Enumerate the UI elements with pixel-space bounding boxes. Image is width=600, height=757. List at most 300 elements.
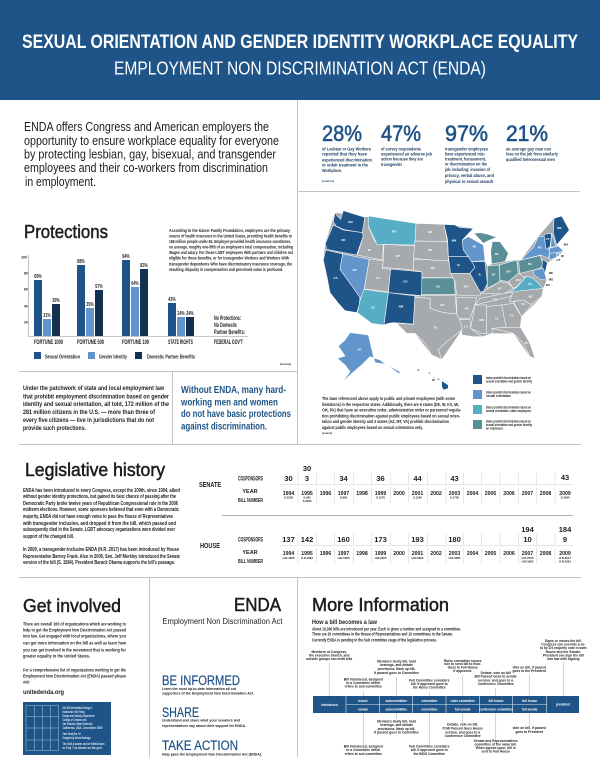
step note: rules committee: rule to send bill to floor. bbox=[444, 662, 481, 666]
step note: senate introduction bbox=[344, 744, 383, 756]
credit box with grid poster: College of Creative Arts bbox=[62, 718, 87, 722]
step note: subcommittee: hearings, and debate bbox=[380, 663, 413, 667]
text block: get involved: visit: bbox=[23, 680, 30, 684]
state abbreviations: WY bbox=[396, 254, 400, 258]
credit box with grid poster: California, USA - December 2009 bbox=[62, 726, 103, 730]
step note: floor debate: Conference Committee bbox=[478, 682, 514, 686]
text block: patchwork paragraph: 281 million citizens in the U.S. — more than three of bbox=[23, 409, 156, 416]
text block: get involved: can get more information on the bill as well as learn how bbox=[23, 640, 126, 646]
credit box with grid poster: to 5 by 7 as shown on the grid. bbox=[62, 746, 103, 750]
federal note: No Protections: bbox=[214, 316, 241, 322]
step note: floor debate bbox=[475, 671, 517, 686]
state abbreviations: NV bbox=[353, 268, 357, 272]
step note: rules committee bbox=[444, 659, 482, 673]
table: Senate: SENATE bbox=[199, 482, 221, 489]
step note: president: Signs or vetoes the bill. bbox=[545, 639, 582, 643]
house cosponsor counts: 137 bbox=[282, 535, 295, 544]
state abbreviations: WI bbox=[473, 245, 476, 249]
text block: legislative history: support of the changed bill. bbox=[23, 534, 74, 540]
process bar: conference committee bbox=[479, 708, 513, 712]
state abbreviations: WA bbox=[348, 220, 354, 224]
house bill numbers: H.R.2355 bbox=[375, 556, 387, 560]
text block: map note: against public employees based on sexual orientation only. bbox=[322, 425, 423, 430]
senate years: 2007 bbox=[522, 491, 533, 497]
block: take action: Help pass the Employment Non Discrimination Act (ENDA). bbox=[162, 752, 262, 756]
text block: legislative history: majority, ENDA did not have enough votes to pass the House of Representatives bbox=[23, 514, 173, 520]
block: share: SHARE bbox=[162, 705, 199, 720]
senate years: 1998 bbox=[356, 491, 368, 497]
state abbreviations: GA bbox=[509, 314, 515, 318]
category labels: FORTUNE 1000 bbox=[34, 340, 63, 346]
stat: 47%: 47% bbox=[381, 121, 421, 146]
state abbreviations: MO bbox=[464, 285, 469, 289]
stat: 97%: transgender employees bbox=[445, 146, 488, 152]
senate cosponsor counts bbox=[284, 464, 569, 483]
state abbreviations: OK bbox=[440, 303, 445, 307]
bars: Fortune 100: 94% bbox=[122, 254, 130, 260]
step note: senate committee: the BIDS Committee bbox=[413, 752, 445, 756]
house bill numbers: H.R.1858 bbox=[338, 556, 350, 560]
senate years: 1995 bbox=[301, 491, 313, 497]
axis bbox=[28, 255, 248, 336]
callout: without ENDA: working men and women bbox=[180, 398, 278, 408]
bars: Fortune 500: 35% bbox=[86, 302, 94, 308]
state abbreviations: NM bbox=[399, 305, 404, 309]
state abbreviations: SD bbox=[428, 248, 433, 252]
callout: without ENDA bbox=[180, 385, 291, 432]
house years: 2001 bbox=[412, 551, 423, 557]
stat: 97%: job including: invasion of bbox=[444, 167, 490, 172]
credit box with grid poster: Case Study No. 04 bbox=[62, 732, 81, 736]
block: share: Understand and share what your senators and bbox=[162, 718, 241, 722]
senate years: 1999 bbox=[375, 491, 386, 497]
state abbreviations: OR bbox=[341, 238, 346, 242]
credit box with grid poster: Instructor: Wei Yang bbox=[62, 710, 85, 714]
step note: conference committee: committee of the same bill. bbox=[475, 742, 517, 746]
intro text block: ENDA offers Congress and American employers the bbox=[24, 120, 269, 134]
text block: Kaiser paragraph bbox=[169, 228, 293, 272]
senate cosponsor counts: 30 bbox=[303, 464, 311, 473]
federal note: Partner Benefits: bbox=[214, 330, 245, 336]
house years: 2007 bbox=[522, 551, 533, 557]
step note: house introduction: to a Committee which bbox=[346, 681, 380, 685]
step note: drafting: Members of Congress, bbox=[312, 650, 347, 654]
US map bbox=[323, 211, 569, 390]
text block: get involved: There are overall 100 of organizations which are working to bbox=[23, 622, 126, 626]
legend item 3: states prohibit discrimination based on bbox=[486, 406, 531, 410]
state abbreviations: DE bbox=[549, 271, 553, 275]
state abbreviations: TX bbox=[433, 326, 437, 330]
text block: patchwork paragraph: provide such protections. bbox=[23, 425, 86, 432]
block: share bbox=[162, 705, 246, 728]
block: take action: TAKE ACTION bbox=[162, 738, 238, 753]
state abbreviations: IL bbox=[479, 272, 481, 276]
intro text block: employees and their co-workers from discrimination bbox=[24, 161, 268, 175]
text block: bill intro: About 10,000 bills are introduced per year. Each is given a number and assigned to a committee. bbox=[312, 626, 461, 632]
legend item 4 bbox=[473, 420, 532, 430]
process bar: full house bbox=[522, 699, 537, 703]
step note: conference committee: sent to Full House bbox=[481, 750, 510, 754]
senate years: 1997 bbox=[338, 491, 349, 497]
bar chart: protections by employer bbox=[21, 254, 291, 366]
text block: get involved: For a comprehensive list of organizations working to get the bbox=[23, 668, 126, 672]
stat: 21%: lose on the job from similarly bbox=[506, 152, 558, 156]
text block: legislative history: version of the bill (S. 1584). President Barack Obama supports the bill's passage. bbox=[23, 560, 175, 566]
step note: president: House and the Senate. bbox=[546, 650, 581, 654]
step note: senate introduction: refers to sub committee bbox=[345, 752, 382, 756]
state abbreviations: VT bbox=[546, 237, 550, 241]
step note: house introduction: Bill introduced, assigned bbox=[344, 678, 383, 682]
step note: senate committee bbox=[409, 744, 450, 756]
table: Senate: YEAR bbox=[242, 489, 258, 495]
step note: subcommittee: Members study bill, hold bbox=[377, 660, 416, 664]
house years: 1996 bbox=[320, 551, 331, 557]
bars: State rights: 24% bbox=[186, 311, 194, 317]
house years: 2002 bbox=[430, 551, 442, 557]
step note: conference committee bbox=[474, 739, 518, 754]
federal note: No Domestic bbox=[214, 323, 237, 329]
text block: Kaiser paragraph: eligible for these benefits, or for transgender Workers and Workers With bbox=[169, 256, 289, 260]
text block: patchwork paragraph: that prohibit employment discrimination based on gender bbox=[23, 394, 169, 400]
callout: without ENDA: against discrimination. bbox=[181, 422, 267, 432]
text block: bill intro: There are 20 committees in the House of Representatives and 16 committees in the Senate. bbox=[312, 632, 453, 636]
step note: committee: the Rules Committee bbox=[413, 686, 446, 690]
step note: senate floor: If bill Passed Goes House bbox=[443, 726, 483, 730]
senate bill numbers: S.2056 bbox=[303, 499, 312, 503]
state abbreviations: PA bbox=[528, 262, 533, 266]
text block: legislative history: midterm elections. However, some sponsors believed that even with a Democratic bbox=[23, 507, 179, 513]
table: House: BILL NUMBER bbox=[238, 559, 263, 565]
legend item 2: sexual orientation bbox=[486, 394, 511, 398]
state abbreviations: KY bbox=[498, 286, 502, 290]
legend item 1: states prohibit discrimination based on bbox=[486, 376, 531, 380]
text block: map note bbox=[322, 396, 461, 435]
house years: 1998 bbox=[356, 551, 368, 557]
step note: senate floor bbox=[443, 722, 483, 738]
heading: More Information: More Information bbox=[312, 594, 449, 615]
state abbreviations: MA bbox=[564, 243, 569, 247]
stat: 47%: of survey respondents bbox=[381, 146, 421, 152]
category labels: FORTUNE 500 bbox=[77, 340, 104, 346]
senate bill numbers: S.1276 bbox=[376, 496, 385, 500]
y axis ticks: 100 bbox=[21, 256, 27, 260]
step note: drafting: the executive branch, and bbox=[309, 654, 350, 658]
process bar: subcommittee bbox=[385, 708, 407, 712]
stat: 28%: 28% bbox=[322, 121, 362, 146]
house years: 2008 bbox=[540, 551, 551, 557]
legend: Sexual Orientation bbox=[45, 354, 80, 360]
house bill numbers: H.R.2981 bbox=[559, 560, 571, 564]
text block: legislative history: without gender identity protections, but gained its best chance of passing after the bbox=[22, 494, 176, 500]
stat: 28% bbox=[322, 121, 372, 183]
state abbreviations: AK bbox=[357, 348, 362, 352]
step note: floor debate: version, and goes to a bbox=[478, 678, 513, 682]
stat: 97%: or discrimination on the bbox=[445, 162, 487, 166]
bars: State rights bbox=[168, 297, 194, 336]
house years: 1995 bbox=[301, 551, 313, 557]
senate bill numbers: S.2238 bbox=[284, 496, 293, 500]
stat: 28%: of Lesbian or Gay Workers bbox=[322, 146, 371, 152]
house years: 2006 bbox=[503, 551, 515, 557]
step note: senate introduction: Bill introduced, assigned bbox=[344, 744, 383, 748]
website link: unitedenda.org bbox=[23, 689, 64, 696]
senate years bbox=[283, 491, 571, 497]
state abbreviations: ME bbox=[557, 226, 562, 230]
state abbreviations: NC bbox=[529, 295, 534, 299]
credit box with grid poster: The Grid-it poster can be folded down bbox=[62, 742, 105, 746]
step note: house introduction bbox=[344, 678, 383, 688]
heading: Protections: Protections bbox=[24, 221, 108, 242]
legend bbox=[34, 352, 291, 366]
stat: 28%: or unfair treatment in the bbox=[322, 162, 368, 168]
step note: floor debate: Debate, vote on bill bbox=[481, 671, 511, 675]
state abbreviations: FL bbox=[525, 341, 529, 345]
step note: committee bbox=[409, 678, 450, 690]
step note: senate subcommittee bbox=[374, 720, 419, 734]
stat: 28%: reported that they have bbox=[322, 152, 367, 156]
y axis ticks: 40 bbox=[24, 304, 28, 308]
flowchart: how a bill becomes a law bbox=[306, 639, 587, 756]
legend: (source) bbox=[280, 363, 291, 366]
text block: Kaiser paragraph: 158 million people under 65. Employer-provided health insurance constitutes, bbox=[169, 239, 291, 244]
map legend bbox=[473, 375, 532, 430]
text block: map note: tion prohibiting discrimination against public employees based on sexual orien- bbox=[322, 414, 460, 418]
y axis ticks bbox=[21, 256, 28, 324]
house cosponsor counts: 184 bbox=[559, 525, 572, 534]
text block: Kaiser paragraph: source of health insurance in the United States, providing health benefits to bbox=[169, 234, 292, 238]
heading: Get involved: Get involved bbox=[23, 595, 121, 616]
process bar bbox=[313, 696, 579, 713]
heading: ENDA: ENDA bbox=[234, 594, 282, 615]
process bar: president bbox=[556, 702, 571, 706]
step note: president: into law with signing bbox=[547, 657, 580, 661]
category labels: STATE RIGHTS bbox=[168, 340, 193, 346]
stat: 97%: privacy, verbal abuse, and bbox=[445, 173, 494, 178]
step note: rules committee: if approved. bbox=[453, 669, 472, 673]
block: be informed: Learn the most up-to-date information all out bbox=[162, 687, 237, 691]
state abbreviations bbox=[334, 220, 569, 382]
process bar: subcommittee bbox=[385, 699, 407, 703]
intro text block: opportunity to ensure workplace equality for everyone bbox=[24, 134, 279, 148]
text block: Kaiser paragraph: Wages and salary. For those LGBT employees With partners and children not bbox=[169, 250, 293, 255]
step note: subcommittee: provisions. Mark up bill. bbox=[378, 667, 415, 671]
table: Senate: BILL NUMBER bbox=[238, 498, 263, 504]
state abbreviations: UT bbox=[376, 276, 380, 280]
callout: without ENDA: do not have basic protections bbox=[181, 409, 291, 420]
stat: 97%: have experienced mis- bbox=[445, 152, 485, 156]
process bar: full house bbox=[488, 699, 504, 703]
step note: president bbox=[540, 639, 587, 661]
bars: Fortune 500: 88% bbox=[77, 259, 85, 265]
bars: Fortune 1000: 39% bbox=[52, 298, 60, 304]
senate years: 2000 bbox=[393, 491, 405, 497]
house cosponsor counts: 194 bbox=[521, 525, 535, 534]
bars: Fortune 100 bbox=[122, 254, 148, 336]
house bill numbers: H.R.3285 bbox=[449, 556, 461, 560]
step note: senate floor: Conference Committee bbox=[445, 734, 481, 738]
senate bill numbers: S.932 bbox=[303, 496, 311, 500]
step note: final vote: goes to the President bbox=[513, 669, 547, 673]
legend item 4: sexual orientation and gender identity bbox=[486, 423, 532, 427]
senate bill numbers: S.1284 bbox=[413, 496, 422, 500]
text block: Kaiser paragraph: on average, roughly one-fifth of an employee's total compensation, including bbox=[169, 244, 293, 250]
step note: senate final vote bbox=[512, 726, 546, 734]
category labels bbox=[34, 340, 243, 346]
house cosponsor counts: 142 bbox=[301, 535, 313, 544]
legend item 2 bbox=[473, 390, 531, 399]
senate years: 2006 bbox=[503, 491, 515, 497]
credit box with grid poster: DAI 325 Information Design 1 bbox=[62, 706, 93, 710]
step note: rules committee: Goes to Full House bbox=[448, 666, 478, 670]
block: be informed bbox=[162, 673, 254, 696]
text block: get involved: greater equality in the United States. bbox=[23, 654, 90, 658]
state abbreviations: MI bbox=[495, 252, 498, 256]
step note: subcommittee: If passed goes to Committee bbox=[374, 671, 419, 675]
house bill numbers: H.R.2017 bbox=[559, 556, 571, 560]
state abbreviations: IN bbox=[492, 272, 495, 276]
text block: get involved bbox=[23, 622, 126, 696]
senate bill numbers bbox=[284, 496, 570, 503]
step note: senate subcommittee: Members study bill, hold bbox=[377, 720, 416, 724]
text block: legislative history bbox=[22, 488, 180, 566]
stat: 97%: treatment, harassment, bbox=[445, 156, 486, 162]
text block: map note: OH, PA) that have an executive order, administrative order or personnel regula- bbox=[322, 408, 461, 412]
step note: conference committee: Senate and Representatives bbox=[474, 739, 518, 743]
legend: Domestic Partner Benefits bbox=[147, 354, 195, 360]
credit box with grid poster bbox=[23, 702, 111, 755]
stat: 47%: experienced an adverse job bbox=[381, 152, 432, 156]
state abbreviations: MN bbox=[452, 239, 456, 243]
block: be informed: BE INFORMED bbox=[162, 673, 240, 688]
block: share: representatives say about their support for ENDA. bbox=[162, 724, 246, 728]
step note: president: President can sign the bill bbox=[543, 654, 584, 658]
heading: Legislative history: Legislative history bbox=[25, 459, 166, 480]
y axis ticks: 80 bbox=[24, 272, 28, 276]
house cosponsor counts bbox=[282, 525, 572, 544]
step note: final vote bbox=[512, 666, 547, 673]
stat: 21% bbox=[506, 121, 558, 162]
house cosponsor counts: 160 bbox=[337, 535, 350, 544]
state abbreviations: MS bbox=[479, 318, 484, 322]
intro text block: by protecting lesbian, gay, bisexual, and transgender bbox=[24, 148, 276, 162]
stat: 97%: physical or sexual assault bbox=[445, 179, 493, 184]
text block: legislative history: subsequently died in the Senate. LGBT advocacy organizations were divided over bbox=[23, 527, 175, 533]
state abbreviations: AL bbox=[495, 316, 499, 320]
legend item 2: states prohibit discrimination based on bbox=[486, 390, 531, 394]
house cosponsor counts: 10 bbox=[523, 535, 532, 544]
text block: legislative history: ENDA has been introduced in every Congress, except the 109th, since 1994, albeit bbox=[23, 488, 180, 494]
step note: senate final vote: goes to President bbox=[515, 730, 544, 734]
text block: get involved: into law. Get engaged with local organizations, where you bbox=[23, 634, 126, 638]
process bar: senate bbox=[358, 708, 368, 712]
senate years: 1994 bbox=[283, 491, 294, 497]
state abbreviations: VA bbox=[528, 282, 533, 286]
process bar: full senate bbox=[522, 708, 538, 712]
table: House: HOUSE bbox=[200, 543, 220, 550]
senate years: 2009 bbox=[559, 491, 571, 497]
process bar: full senate bbox=[455, 708, 471, 712]
state abbreviations: DC bbox=[546, 283, 551, 287]
legend item 3 bbox=[473, 405, 531, 414]
step note: floor debate: Bill Passed Goes to senate bbox=[475, 674, 517, 678]
stat: 47%: transgender bbox=[381, 162, 402, 167]
callout: without ENDA: Without ENDA, many hard- bbox=[181, 385, 286, 396]
senate years: 2004 bbox=[467, 491, 478, 497]
state abbreviations: NY bbox=[538, 245, 542, 249]
text block: map note: (source) bbox=[322, 432, 332, 435]
bars: Fortune 1000: 69% bbox=[34, 274, 42, 280]
state abbreviations: AR bbox=[465, 306, 470, 310]
stat: 28%: (source) bbox=[322, 180, 334, 183]
block: be informed: supporters of the Employment Non Discrimination Act. bbox=[162, 692, 254, 696]
house bill numbers: H.R.4636 bbox=[283, 556, 295, 560]
senate bill numbers: S.1584 bbox=[561, 496, 570, 500]
step note: senate floor: Debate, vote on bill. bbox=[447, 722, 478, 726]
state abbreviations: TN bbox=[493, 297, 497, 301]
step note: senate committee: Full Committee considers bbox=[409, 744, 450, 748]
text block: Kaiser paragraph: According to the Kaiser Family Foundation, employers are the primary bbox=[169, 228, 290, 233]
step note: senate introduction: to a Committee which bbox=[346, 748, 380, 752]
bars: State rights: 43% bbox=[168, 297, 176, 303]
subheading: Employment Non Discrimination Act: Employment Non Discrimination Act bbox=[162, 616, 283, 626]
legend: Gender Identity bbox=[99, 354, 127, 360]
text block: Kaiser paragraph: transgender dependents Who have discriminatory insurance coverage, the bbox=[169, 262, 292, 266]
house bill numbers: H.R.3685 bbox=[522, 560, 534, 564]
house cosponsor counts: 173 bbox=[374, 535, 387, 544]
house bill numbers: H.R.2015 bbox=[522, 556, 534, 560]
house years: 2005 bbox=[485, 551, 496, 557]
state abbreviations: ID bbox=[368, 248, 372, 252]
subtitle: EMPLOYMENT NON DISCRIMINATION ACT (ENDA) bbox=[114, 58, 486, 78]
text block: map note: limitations) in the respective states. Additionally, there are 6 states (DE, IN, KS, MI, bbox=[322, 402, 459, 407]
step note: committee: Full Committee considers bbox=[409, 678, 450, 682]
text block: patchwork paragraph: identity and sexual orientation, all told, 172 million of the bbox=[23, 401, 169, 408]
senate bill numbers: S.869 bbox=[340, 496, 348, 500]
table: House bbox=[200, 525, 573, 565]
process bar: rules committee bbox=[450, 699, 475, 703]
senate years: 2005 bbox=[485, 491, 496, 497]
state abbreviations: HI bbox=[432, 378, 435, 382]
senate years: 2001 bbox=[412, 491, 423, 497]
bars: Fortune 1000: 31% bbox=[43, 313, 51, 319]
step note: senate committee: bill. If approved goes to bbox=[411, 748, 448, 752]
step note: rules committee: Rules committee issues bbox=[444, 659, 482, 663]
legend item 1 bbox=[473, 375, 532, 384]
bars: State rights: 24% bbox=[177, 311, 185, 317]
credit box with grid poster: San Francisco State University bbox=[62, 722, 93, 726]
step note: senate subcommittee: provisions. Mark up bill. bbox=[378, 727, 415, 731]
text block: Kaiser paragraph: resulting disparity in compensation and perceived value is profound. bbox=[169, 267, 283, 272]
stat: 47%: action because they are bbox=[381, 156, 423, 162]
state abbreviations: OH bbox=[506, 270, 511, 274]
step note: senate subcommittee: hearings, and debate bbox=[380, 723, 413, 727]
bars: Fortune 500 bbox=[77, 259, 103, 336]
step note: senate floor: version, and goes to a bbox=[445, 730, 480, 734]
senate cosponsor counts: 44 bbox=[413, 474, 422, 483]
step note: president: to by 2/3 majority vote in both bbox=[540, 646, 587, 650]
header banner bbox=[0, 0, 600, 100]
table: House: YEAR bbox=[242, 550, 258, 556]
house cosponsor counts: 180 bbox=[448, 535, 461, 544]
senate cosponsor counts: 34 bbox=[339, 474, 348, 483]
house bill numbers: H.R.1863 bbox=[301, 556, 313, 560]
text block: legislative history: In 2009, a transgender-inclusive ENDA (H.R. 2017) has been introduced by House bbox=[23, 547, 179, 553]
stat: 28%: Workplace. bbox=[322, 168, 342, 173]
text block: patchwork paragraph: Under the patchwork of state and local employment law bbox=[23, 385, 165, 392]
senate cosponsor counts: 36 bbox=[376, 474, 385, 483]
state abbreviations: CT bbox=[556, 258, 560, 262]
y axis ticks: 20 bbox=[24, 320, 28, 324]
